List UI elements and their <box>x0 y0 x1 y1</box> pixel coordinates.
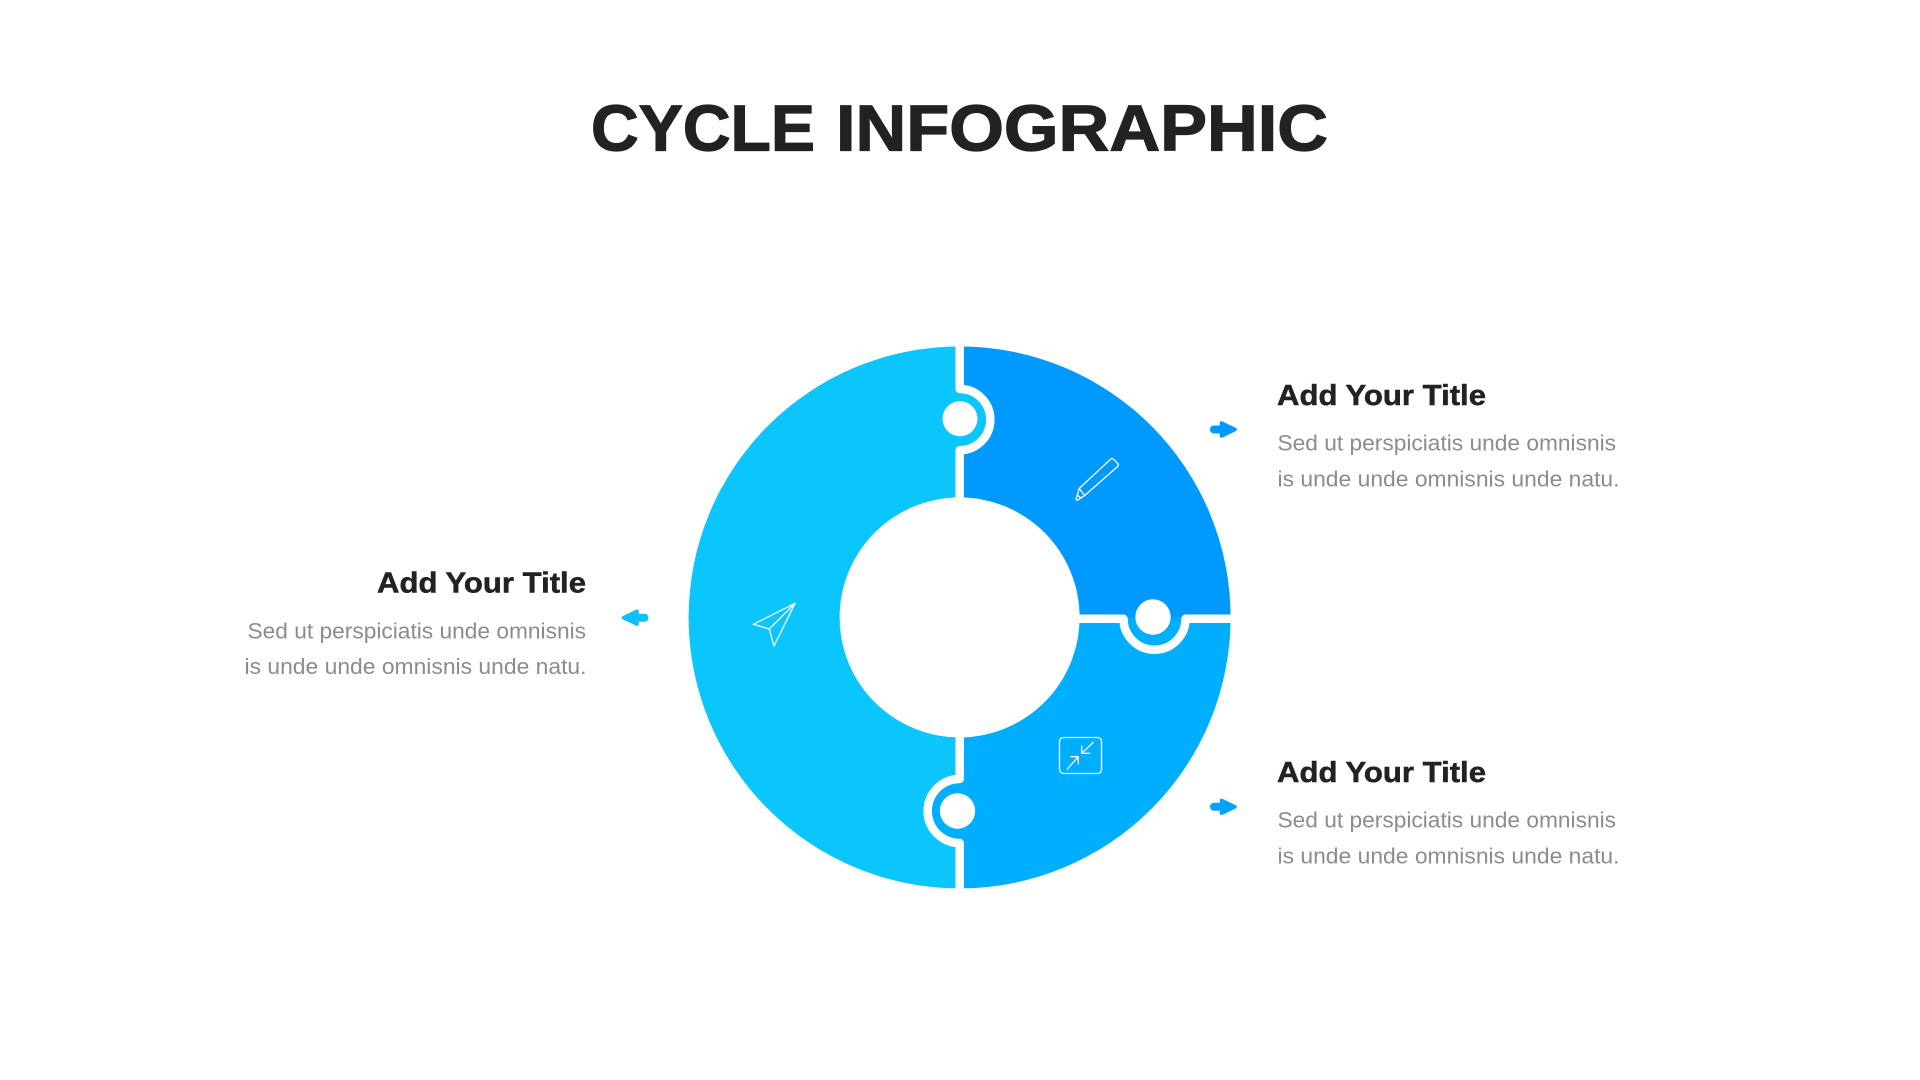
text block: bottom right <box>1277 757 1620 868</box>
segment: lower right <box>927 617 1231 888</box>
title: CYCLE <box>591 92 815 165</box>
puzzle hole: right <box>1135 599 1171 635</box>
body: is unde unde omnisnis unde natu. <box>1278 844 1620 868</box>
arrow: top right <box>1214 423 1235 436</box>
arrow: bottom right <box>1214 800 1235 813</box>
top tab restored over dark segment <box>929 388 991 450</box>
title <box>591 92 1328 165</box>
body <box>244 618 586 679</box>
body <box>1278 431 1620 492</box>
segment: upper right <box>960 346 1231 650</box>
title: INFOGRAPHIC <box>836 92 1328 165</box>
body: Sed ut perspiciatis unde omnisnis <box>1278 431 1616 456</box>
text block: top right <box>1277 380 1620 492</box>
body: Sed ut perspiciatis unde omnisnis <box>1278 808 1616 833</box>
heading: Add Your Title <box>1277 757 1486 789</box>
arrow: left <box>624 611 644 624</box>
icon: pencil <box>1076 459 1118 500</box>
separators <box>928 340 1236 894</box>
heading: Add Your Title <box>1277 380 1486 412</box>
puzzle hole: bottom <box>940 793 975 829</box>
body: is unde unde omnisnis unde natu. <box>244 654 586 679</box>
body: Sed ut perspiciatis unde omnisnis <box>248 618 586 643</box>
body: is unde unde omnisnis unde natu. <box>1278 466 1620 492</box>
cycle diagram <box>689 340 1236 894</box>
text block: left <box>244 568 586 679</box>
segment: left half <box>689 346 960 888</box>
body <box>1278 808 1620 868</box>
puzzle hole: top <box>942 401 978 436</box>
icon: compress arrows <box>1060 738 1102 774</box>
icon: paper plane <box>753 603 795 646</box>
heading: Add Your Title <box>377 568 586 600</box>
